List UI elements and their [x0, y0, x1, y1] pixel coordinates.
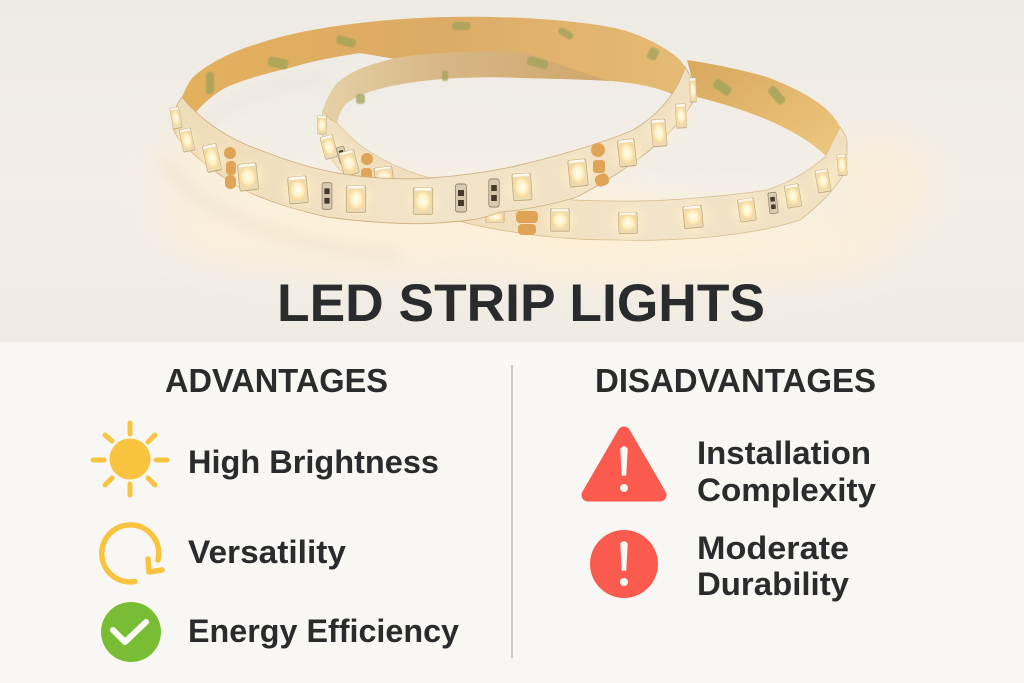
- label: installation complexity: Installation: [697, 435, 871, 471]
- label: versatility: Versatility: [188, 534, 346, 570]
- icon: rotation arrow: [102, 525, 162, 582]
- title: LED STRIP LIGHTS: [277, 274, 765, 333]
- strip ring 1: back inner surface: [182, 17, 690, 115]
- label: energy efficiency: Energy Efficiency: [188, 613, 459, 649]
- strip ring 2: left back inner surface: [323, 51, 610, 123]
- icon: alert circle: [590, 530, 658, 598]
- strip ring 2: right front band: [440, 127, 847, 240]
- icon: warning triangle: [588, 433, 660, 495]
- heading: disadvantages: DISADVANTAGES: [595, 362, 876, 399]
- LED strip photo illustration: [170, 17, 850, 240]
- label: moderate durability: Moderate: [697, 530, 849, 566]
- heading: advantages: ADVANTAGES: [165, 362, 388, 399]
- strip ring 1: front band: [173, 67, 697, 224]
- strip ring 2 LED glow: [320, 138, 850, 236]
- photo background: [0, 0, 1024, 342]
- label: moderate durability: Durability: [697, 566, 849, 602]
- strip ring 2: right back inner surface: [687, 60, 845, 157]
- label: installation complexity: [697, 435, 876, 508]
- icon: green check: [101, 602, 161, 662]
- strip ring 2: left front band: [322, 110, 430, 215]
- icon: sun: [93, 423, 167, 495]
- strip ring 1 LED glow: [179, 108, 689, 214]
- strip ring 1 LEDs: [170, 78, 697, 214]
- adhesive tape marks: [206, 22, 786, 106]
- lower panel: [0, 342, 1024, 683]
- label: installation complexity: Complexity: [697, 472, 876, 508]
- label: high brightness: High Brightness: [188, 444, 439, 480]
- strip ring 2 LEDs: [317, 116, 847, 235]
- label: moderate durability: [697, 530, 849, 602]
